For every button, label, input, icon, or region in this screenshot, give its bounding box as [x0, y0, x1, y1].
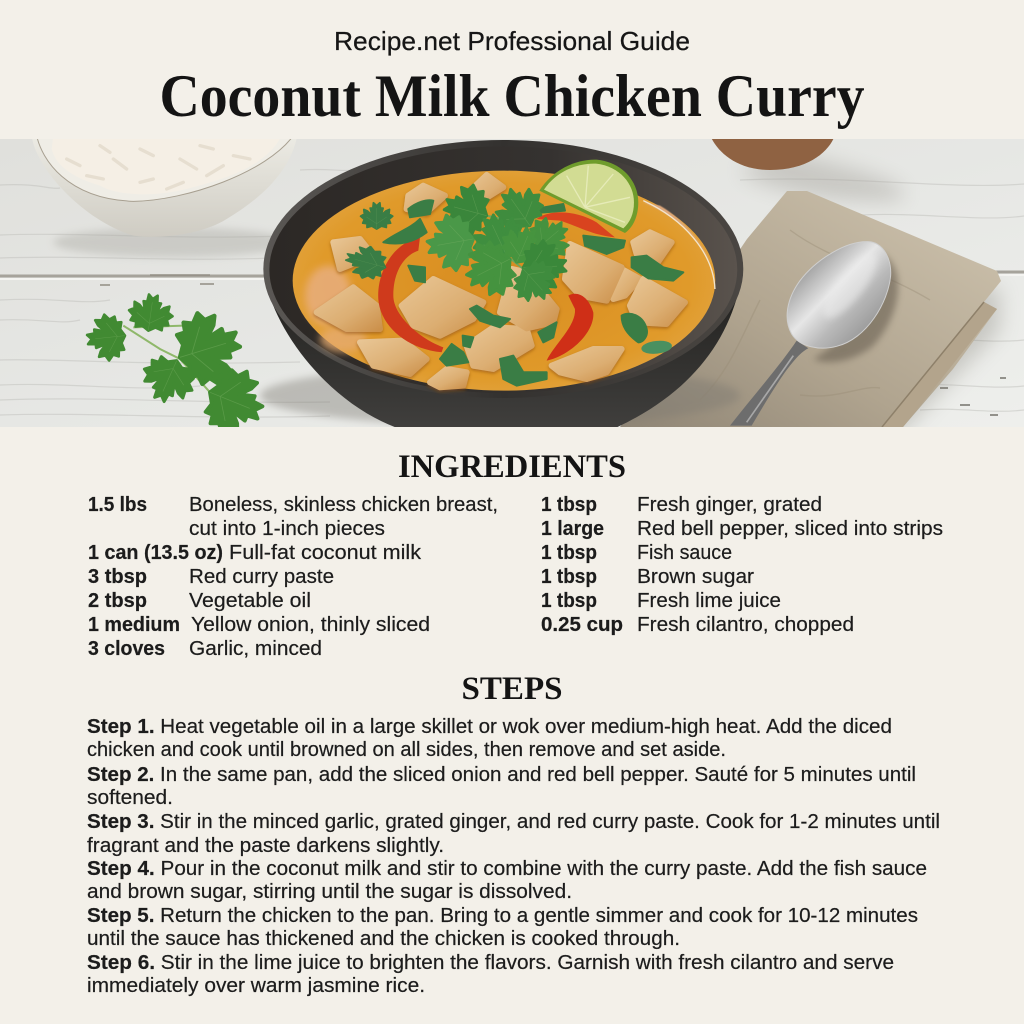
- ingredients left column: Vegetable oil: [189, 590, 311, 612]
- ingredients left column: 1 medium: [88, 614, 180, 636]
- herb flecks in sauce: [343, 200, 683, 386]
- header: [160, 26, 864, 129]
- curry sauce: [293, 171, 715, 391]
- step list: Step 5. Return the chicken to the pan. Bring to a gentle simmer and cook for 10-12 minutes: [87, 905, 918, 927]
- step list: and brown sugar, stirring until the sugar is dissolved.: [87, 881, 572, 903]
- ingredients left column: 3 cloves: [88, 638, 165, 660]
- ingredients left column: cut into 1-inch pieces: [189, 518, 385, 540]
- ingredients left column: Boneless, skinless chicken breast,: [189, 494, 498, 516]
- ingredients right column: Brown sugar: [637, 566, 754, 588]
- bowl interior: [269, 146, 737, 393]
- step list: until the sauce has thickened and the chicken is cooked through.: [87, 928, 680, 950]
- step list: Step 6. Stir in the lime juice to brighten the flavors. Garnish with fresh cilantro and serve: [87, 952, 894, 974]
- ingredients left column: [88, 494, 498, 660]
- step list: Step 2. In the same pan, add the sliced onion and red bell pepper. Sauté for 5 minutes until: [87, 764, 916, 786]
- step list: Step 3. Stir in the minced garlic, grated ginger, and red curry paste. Cook for 1-2 minutes until: [87, 811, 940, 833]
- step list: immediately over warm jasmine rice.: [87, 975, 425, 997]
- cilantro sprig on table: [86, 293, 264, 427]
- ingredients left column: Yellow onion, thinly sliced: [191, 614, 430, 636]
- ingredients heading: INGREDIENTS: [398, 449, 626, 485]
- ingredients left column: 2 tbsp: [88, 590, 147, 612]
- curry bowl: [260, 140, 743, 429]
- ingredients right column: 1 tbsp: [541, 494, 597, 516]
- ingredients right column: 1 large: [541, 518, 604, 540]
- step list: [87, 716, 940, 997]
- ingredients right column: Red bell pepper, sliced into strips: [637, 518, 943, 540]
- step list: Step 1. Heat vegetable oil in a large skillet or wok over medium-high heat. Add the diced: [87, 716, 892, 738]
- ingredients left column: Red curry paste: [189, 566, 334, 588]
- spoon: [730, 242, 898, 426]
- bowl rim: [263, 140, 743, 398]
- ingredients left column: 1.5 lbs: [88, 494, 147, 516]
- step list: Step 4. Pour in the coconut milk and stir to combine with the curry paste. Add the fish sauce: [87, 858, 927, 880]
- step list: fragrant and the paste darkens slightly.: [87, 835, 444, 857]
- steps section: [87, 671, 940, 997]
- ingredients left column: 3 tbsp: [88, 566, 147, 588]
- ingredients right column: 1 tbsp: [541, 590, 597, 612]
- ingredients section: [88, 449, 943, 660]
- ingredients left column: 1 can (13.5 oz): [88, 542, 223, 564]
- ingredients right column: [541, 494, 943, 636]
- napkin: [620, 191, 1001, 435]
- cilantro garnish: [426, 184, 570, 302]
- step list: chicken and cook until browned on all sides, then remove and set aside.: [87, 739, 726, 761]
- wooden bowl top right: [710, 135, 904, 201]
- ingredients right column: Fresh cilantro, chopped: [637, 614, 854, 636]
- steps heading: STEPS: [462, 671, 562, 707]
- ingredients right column: 1 tbsp: [541, 542, 597, 564]
- red peppers: [378, 212, 615, 361]
- subtitle: Recipe.net Professional Guide: [334, 26, 690, 56]
- hero photo: bowl of curry on white wood table: [0, 135, 1024, 443]
- ingredients right column: 1 tbsp: [541, 566, 597, 588]
- ingredients right column: Fresh ginger, grated: [637, 494, 822, 516]
- ingredients right column: Fresh lime juice: [637, 590, 781, 612]
- chicken pieces: [317, 175, 685, 387]
- ingredients right column: 0.25 cup: [541, 614, 623, 636]
- bowl body: [272, 300, 736, 427]
- ingredients left column: Garlic, minced: [189, 638, 322, 660]
- ingredients left column: Full-fat coconut milk: [229, 542, 422, 564]
- title: Coconut Milk Chicken Curry: [160, 63, 864, 129]
- step list: softened.: [87, 787, 173, 809]
- rice bowl: [32, 136, 297, 257]
- bowl shadow: [258, 372, 738, 426]
- lime wedge: [539, 160, 638, 233]
- ingredients right column: Fish sauce: [637, 542, 732, 564]
- wood table: [0, 139, 1024, 427]
